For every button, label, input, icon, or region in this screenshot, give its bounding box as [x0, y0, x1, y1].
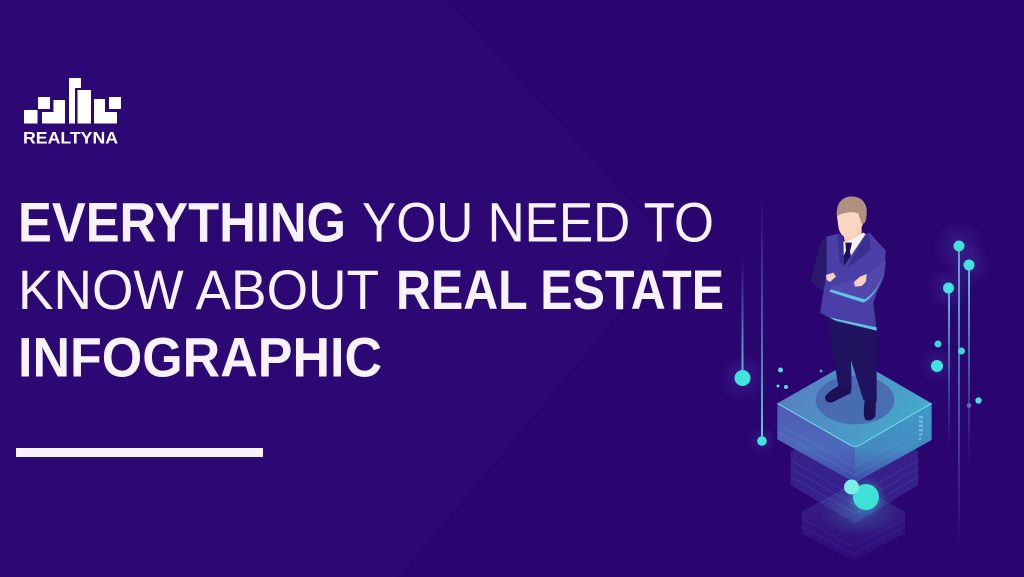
- title line 1 regular: YOU NEED TO: [362, 190, 714, 254]
- platform side grid: [777, 423, 932, 475]
- platform edge highlight: [777, 403, 932, 446]
- node line 1: [933, 220, 985, 546]
- back arm shadow: [811, 235, 837, 293]
- title line 2 regular: KNOW ABOUT: [18, 258, 379, 321]
- logo: Realtyna: [23, 78, 121, 148]
- platform side marks: [920, 416, 922, 440]
- glowing orbs: [844, 477, 886, 517]
- illustration: platform: [777, 359, 932, 483]
- platform left side: [777, 403, 855, 483]
- hair: [837, 196, 867, 224]
- lower stack: [802, 483, 905, 561]
- tie: [843, 243, 852, 266]
- node medium: [919, 348, 955, 384]
- illustration: lower fading stacks: [791, 413, 918, 561]
- node dim: [967, 403, 971, 408]
- crossed arm: [830, 260, 886, 303]
- large orb: [853, 484, 879, 510]
- jacket lapels: [837, 234, 871, 269]
- light node left tall line: [761, 195, 763, 440]
- legs: [828, 307, 877, 402]
- light node left: large node with line: [718, 255, 766, 402]
- divider bar: [16, 448, 263, 457]
- logo mark: [24, 78, 121, 124]
- face: [837, 205, 863, 238]
- small orb: [844, 480, 859, 494]
- light node left bottom: [748, 427, 776, 455]
- platform top: [777, 359, 932, 447]
- right hand: [854, 274, 867, 287]
- small particles: [776, 368, 822, 389]
- right shoe: [864, 398, 876, 420]
- shirt: [838, 233, 869, 270]
- middle stack: [791, 413, 918, 523]
- title line 1 bold: EVERYTHING: [18, 190, 346, 254]
- jacket: [820, 233, 886, 331]
- title line 3 bold: INFOGRAPHIC: [18, 326, 382, 388]
- title: [18, 190, 724, 388]
- right light nodes: [919, 220, 991, 546]
- sleeve highlight: [829, 265, 885, 303]
- illustration: businessman: [811, 196, 886, 420]
- node small: [934, 340, 942, 348]
- left shoe: [825, 386, 852, 403]
- node on line: [958, 348, 965, 354]
- glow under orbs: [820, 490, 900, 537]
- node line 2: [947, 243, 991, 465]
- platform right side: [855, 403, 932, 483]
- jacket hem highlight: [830, 317, 877, 331]
- title line 2 bold: REAL ESTATE: [396, 258, 724, 321]
- logo wordmark: REALTYNA: [23, 130, 118, 148]
- neck: [842, 223, 862, 243]
- platform circle shadow: [816, 376, 894, 424]
- node far right: [975, 397, 982, 404]
- left hand: [826, 273, 836, 282]
- node line 3: [926, 266, 970, 448]
